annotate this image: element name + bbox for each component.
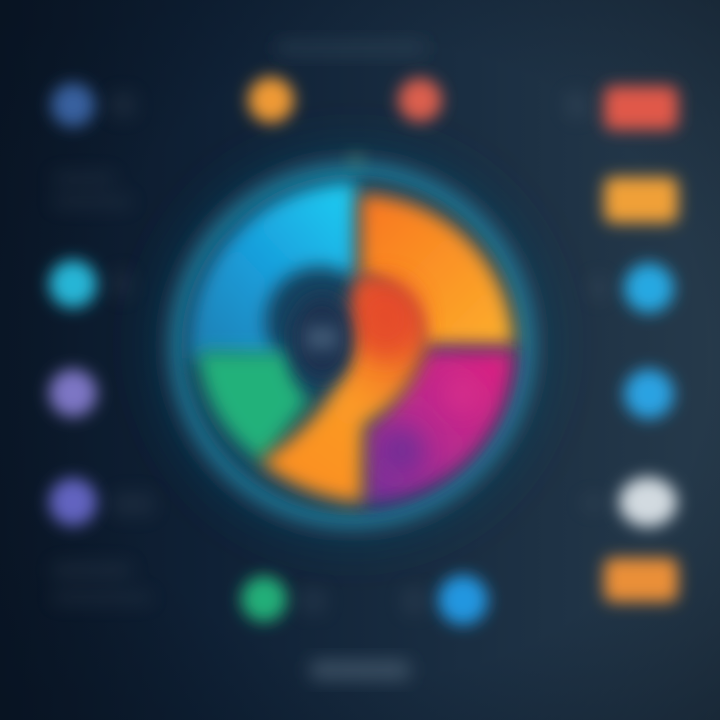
badge: orange	[604, 177, 678, 223]
magenta highlight	[444, 377, 480, 413]
top icons	[248, 77, 442, 123]
left labels	[52, 92, 154, 604]
donut chart	[132, 125, 572, 565]
badge: orange bottom	[604, 558, 678, 602]
inner red highlight	[349, 278, 421, 358]
footer placeholder	[310, 660, 410, 680]
right labels	[566, 92, 608, 510]
chart halo	[132, 125, 572, 565]
icon: amber	[248, 77, 294, 123]
badge: blue top	[624, 263, 674, 313]
segment: green	[198, 352, 310, 462]
icon: blue	[51, 83, 95, 127]
bottom labels	[300, 588, 426, 614]
segment: orange	[360, 194, 514, 346]
badge: white	[619, 477, 677, 527]
title placeholder	[276, 40, 426, 56]
chart inner disc	[187, 180, 517, 510]
top marker	[348, 152, 364, 168]
center label	[306, 326, 338, 350]
icon: indigo	[49, 478, 97, 526]
purple highlight	[380, 428, 424, 472]
segment: blue	[190, 182, 356, 362]
right badges	[566, 86, 678, 602]
chart ring	[179, 172, 525, 518]
left icons	[49, 83, 154, 604]
bottom icons	[241, 575, 488, 625]
badge: blue bottom	[624, 369, 674, 419]
icon: cyan	[49, 260, 97, 308]
icon: lavender	[49, 369, 97, 417]
center hole	[292, 296, 352, 380]
icon: coral	[398, 78, 442, 122]
badge: red	[604, 86, 678, 130]
segment: inner orange	[260, 276, 426, 503]
icon: green	[241, 576, 287, 622]
icon: blue	[438, 575, 488, 625]
segment: magenta and purple	[364, 350, 514, 504]
